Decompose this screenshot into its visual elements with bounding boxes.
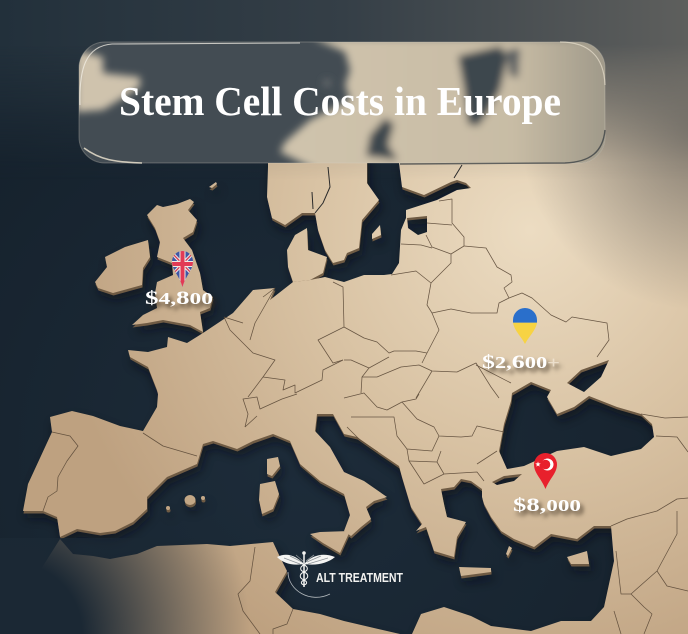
logo text: ALT TREATMENT xyxy=(316,571,403,585)
top dark fade xyxy=(0,0,688,180)
lower-left vignette xyxy=(0,538,300,634)
icon: caduceus xyxy=(277,551,335,597)
icon: UK flag pin xyxy=(172,251,193,287)
icon: Turkey flag pin xyxy=(534,453,557,489)
title panel xyxy=(78,41,606,165)
price: UK: $4, 800 xyxy=(145,288,213,309)
logo: ALT Treatment xyxy=(277,551,403,597)
title text: Stem Cell Costs in Europe xyxy=(119,78,561,124)
UK marker xyxy=(145,250,213,309)
icon: Ukraine flag pin xyxy=(513,308,537,344)
Turkey marker xyxy=(513,453,581,516)
price: Ukraine: $2,600 + xyxy=(482,352,560,373)
price: Turkey: $8, 000 xyxy=(513,495,581,516)
upper-right vignette xyxy=(480,0,688,340)
Ukraine marker xyxy=(482,308,560,373)
